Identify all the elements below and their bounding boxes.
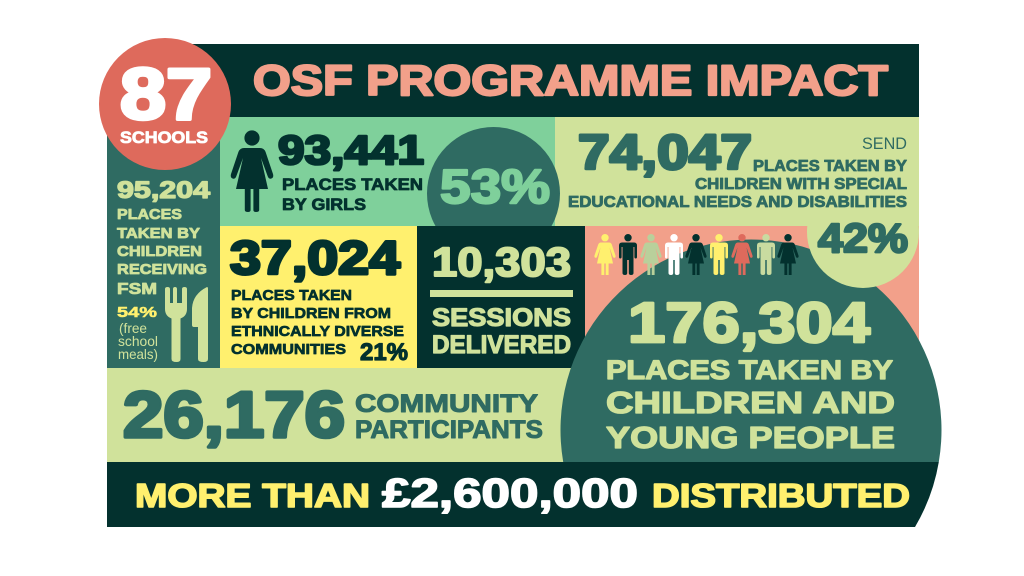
panel: ethnically diverse communities xyxy=(220,226,417,368)
ethnically diverse description: COMMUNITIES xyxy=(231,341,346,358)
icon: sage girl xyxy=(640,234,662,275)
ethnically diverse percentage: 21% xyxy=(360,339,408,366)
free school meals note: meals) xyxy=(118,346,158,362)
icon: yellow girl xyxy=(594,234,616,275)
ethnically diverse figure: 37,024 xyxy=(230,231,400,284)
FSM description: TAKEN BY xyxy=(117,225,200,242)
icons: row of children xyxy=(594,234,799,275)
panel: funding band xyxy=(107,462,939,527)
FSM description: FSM xyxy=(117,281,157,298)
schools number: 87 xyxy=(120,55,212,135)
icon: fork and knife xyxy=(165,287,208,362)
free school meals note xyxy=(118,320,158,362)
children figure: 176,304 xyxy=(628,291,870,355)
panel: SEND xyxy=(555,117,919,226)
icon: pale boy xyxy=(757,234,775,275)
FSM description: RECEIVING xyxy=(117,261,207,278)
SEND description: CHILDREN WITH SPECIAL xyxy=(695,176,907,193)
icon: dark girl xyxy=(685,234,707,275)
funding text xyxy=(135,470,910,516)
ethnically diverse description: PLACES TAKEN xyxy=(231,287,352,304)
FSM figure: 95,204 xyxy=(117,177,211,204)
girls description: BY GIRLS xyxy=(282,195,366,214)
community label: COMMUNITY xyxy=(355,390,538,418)
sessions label xyxy=(432,304,571,359)
circle: 42 percent: 42% xyxy=(818,215,908,261)
title: OSF PROGRAMME IMPACT xyxy=(253,57,888,105)
ethnically diverse description xyxy=(231,287,404,358)
community label xyxy=(355,390,543,444)
panel: sessions delivered xyxy=(417,226,585,368)
free school meals note: school xyxy=(118,333,158,349)
schools label: SCHOOLS xyxy=(120,128,208,147)
community figure: 26,176 xyxy=(123,378,345,451)
girls description: PLACES TAKEN xyxy=(282,175,423,194)
sessions figure: 10,303 xyxy=(432,239,571,285)
sessions label: DELIVERED xyxy=(432,331,571,359)
girls figure: 93,441 xyxy=(278,127,424,173)
panel: title band xyxy=(190,44,919,117)
circle: 53 percent xyxy=(427,127,560,226)
panel: community participants xyxy=(107,368,600,462)
children description xyxy=(606,355,895,455)
circle: 53 percent: 53% xyxy=(440,161,550,214)
girls description xyxy=(282,175,423,214)
icon: girl xyxy=(231,130,273,212)
funding text: MORE THAN xyxy=(135,477,370,514)
icon: second dark girl xyxy=(777,234,799,275)
FSM description: PLACES xyxy=(117,206,182,223)
FSM description: CHILDREN xyxy=(117,243,202,260)
children description: CHILDREN AND xyxy=(606,385,895,420)
SEND description: EDUCATIONAL NEEDS AND DISABILITIES xyxy=(568,194,907,211)
SEND label: SEND xyxy=(862,134,907,153)
SEND description: PLACES TAKEN BY xyxy=(753,158,908,175)
children description: PLACES TAKEN BY xyxy=(606,355,893,385)
icon: dark boy xyxy=(619,234,637,275)
icon: red girl xyxy=(731,234,753,275)
sessions label: SESSIONS xyxy=(432,304,571,332)
icon: yellow boy xyxy=(710,234,728,275)
SEND figure: 74,047 xyxy=(578,126,752,180)
funding text: £2,600,000 xyxy=(382,470,638,516)
circle: 42 percent xyxy=(807,222,919,288)
FSM description xyxy=(117,206,207,298)
community label: PARTICIPANTS xyxy=(355,416,543,444)
funding text: DISTRIBUTED xyxy=(652,477,910,514)
SEND description xyxy=(568,158,908,211)
ethnically diverse description: BY CHILDREN FROM xyxy=(231,305,391,322)
FSM percentage: 54% xyxy=(117,304,157,321)
icon: white boy xyxy=(665,234,683,275)
badge: 87 schools xyxy=(99,38,231,170)
ethnically diverse description: ETHNICALLY DIVERSE xyxy=(231,323,404,340)
panel: girls xyxy=(220,117,555,226)
panel: free school meals xyxy=(107,130,220,368)
free school meals note: (free xyxy=(119,320,147,336)
panel: salmon background xyxy=(585,226,919,366)
children description: YOUNG PEOPLE xyxy=(606,420,895,455)
panel: children and young people circle xyxy=(560,240,942,462)
